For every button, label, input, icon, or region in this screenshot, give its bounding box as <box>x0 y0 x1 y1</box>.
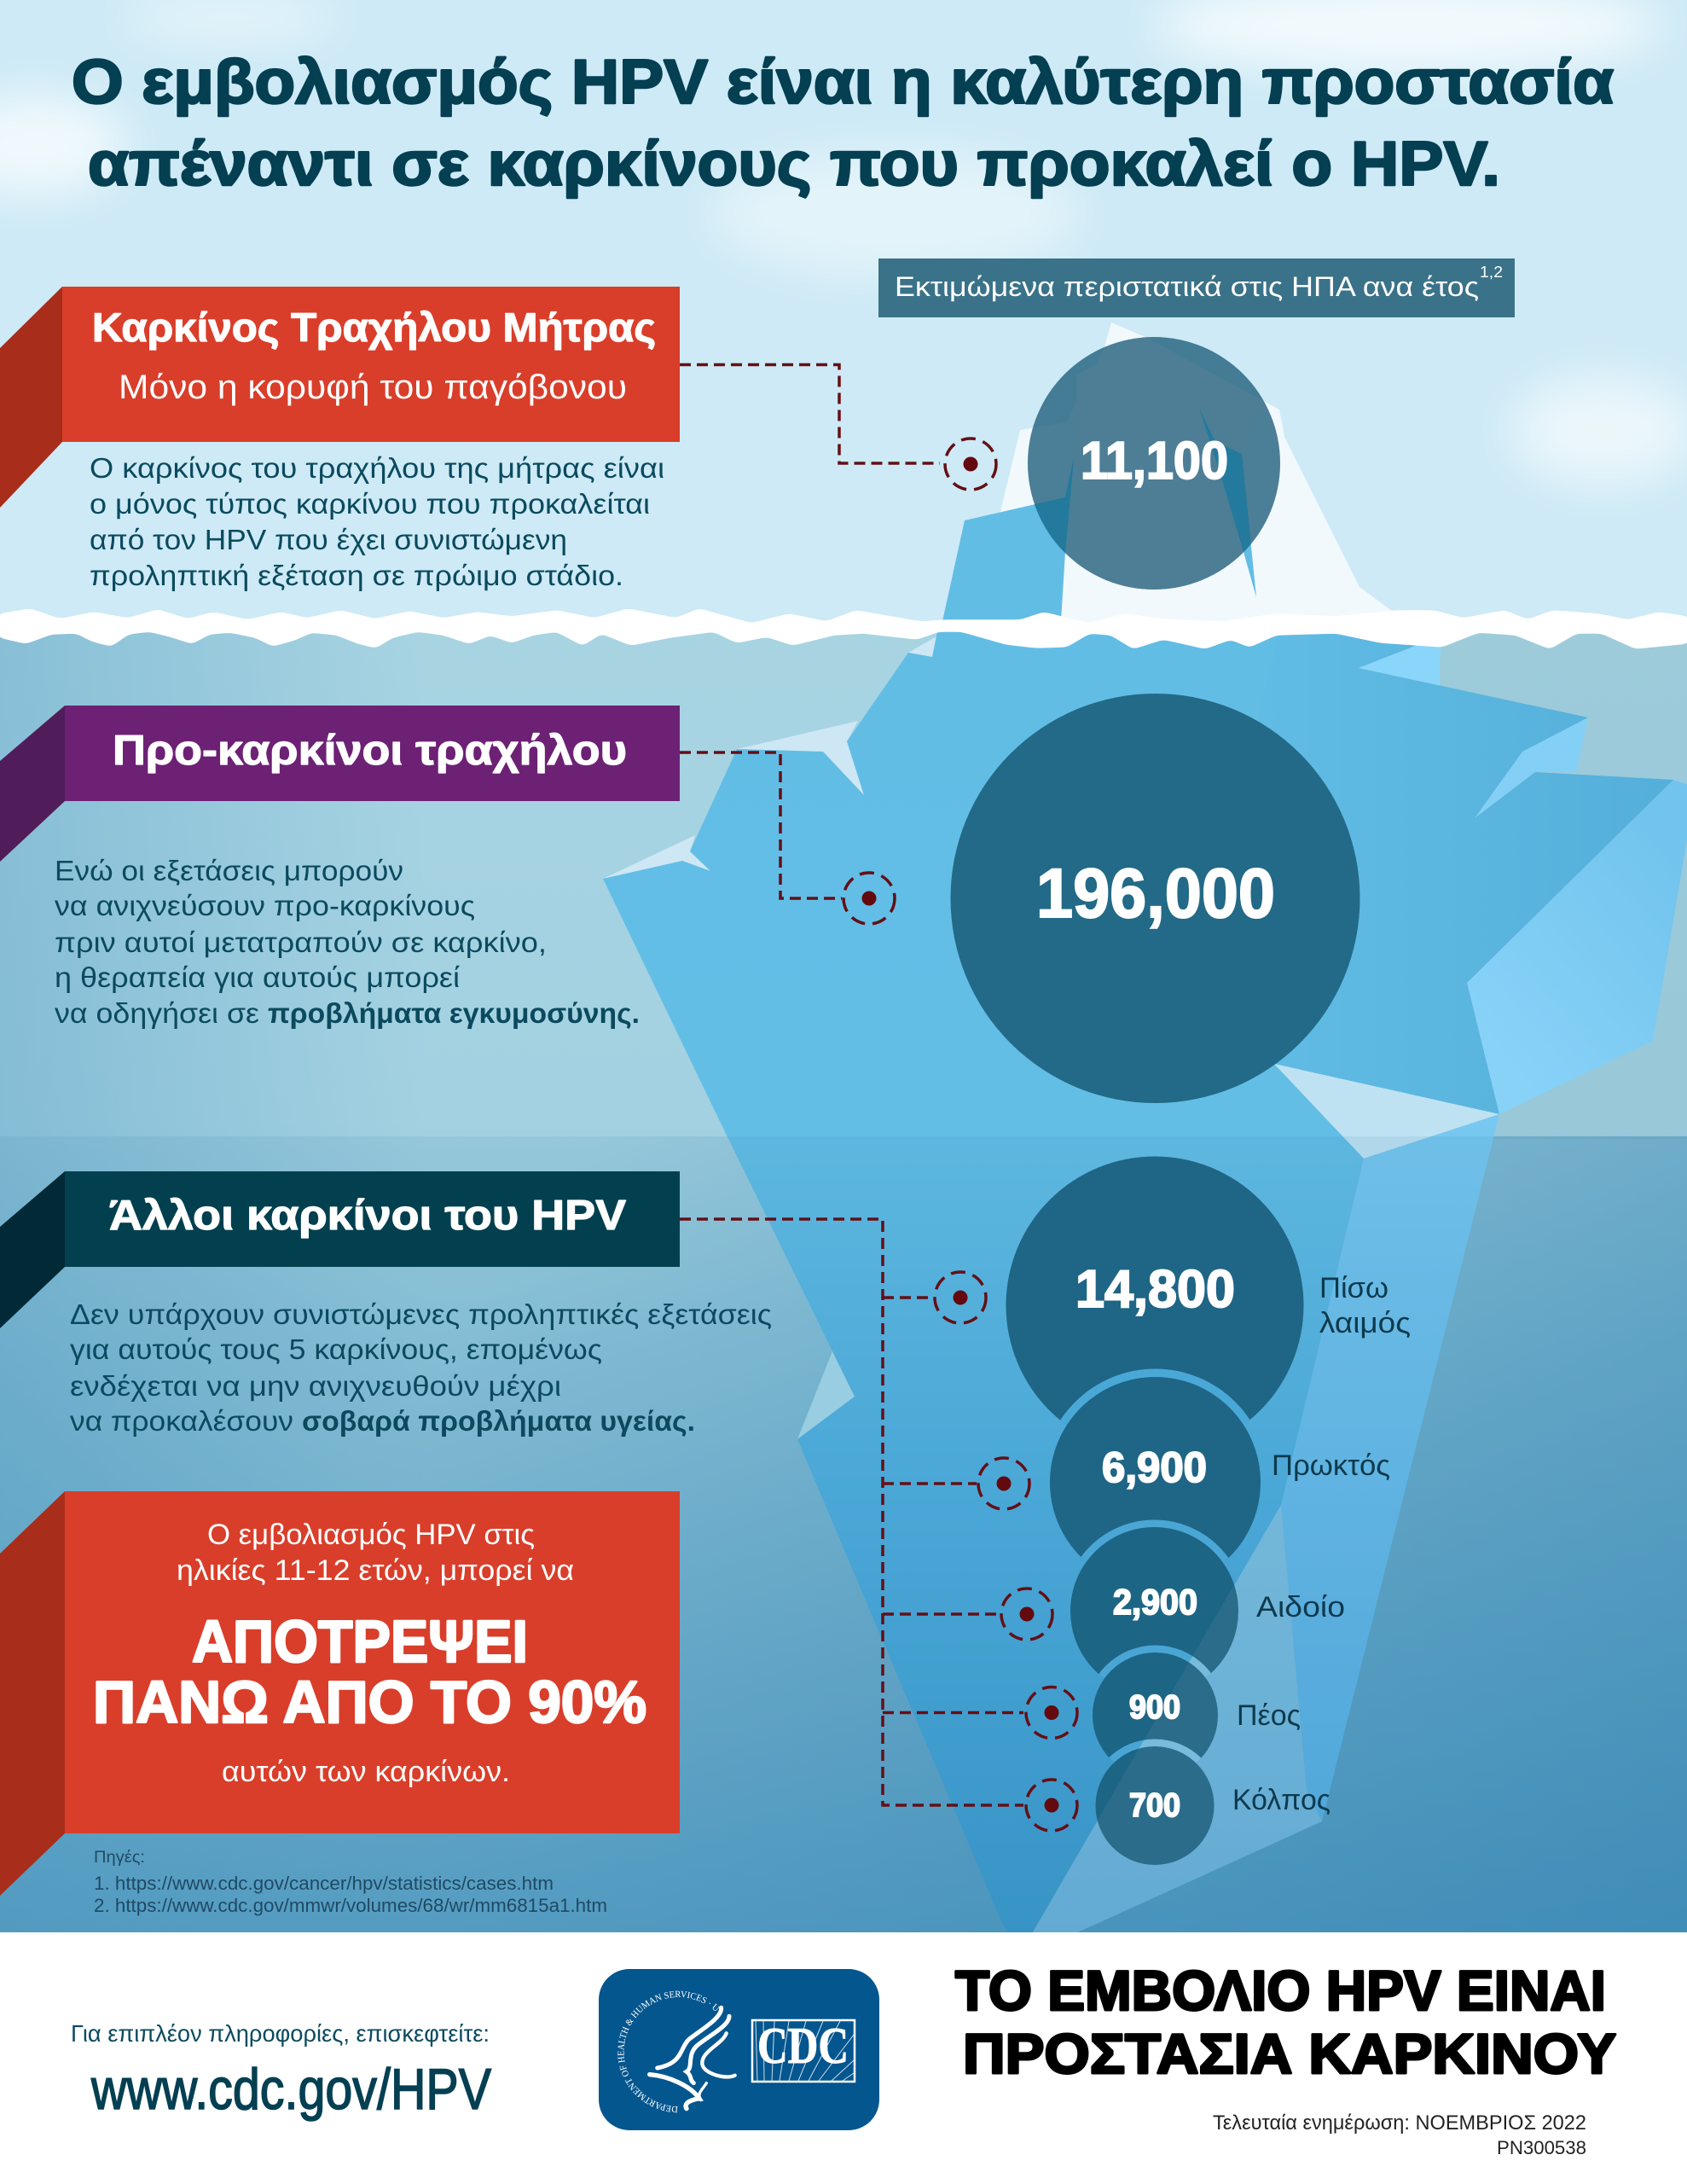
HHS seal text: DEPARTMENT OF HEALTH & HUMAN SERVICES · USA <box>617 1991 720 2112</box>
panel: cervical cancer <box>0 287 680 508</box>
label: penis: Πέος <box>1237 1699 1301 1732</box>
small ice spikes <box>603 636 1588 1439</box>
text: cervical cancer description: ο μόνος τύπος καρκίνου που προκαλείται <box>90 488 650 520</box>
title <box>72 48 1614 199</box>
text: pre-cancers description: προβλήματα εγκυμοσύνης. <box>268 997 640 1029</box>
connector: pre-cancers <box>680 752 895 924</box>
circle: 196,000 pre-cancers <box>950 694 1359 1103</box>
panel: pre-cancers <box>0 706 680 862</box>
circle: 700 vagina: 700 <box>1129 1787 1180 1824</box>
label: throat <box>1319 1272 1411 1339</box>
panel: other HPV cancers: Άλλοι καρκίνοι του HPV <box>109 1193 626 1239</box>
panel: pre-cancers: Προ-καρκίνοι τραχήλου <box>113 728 627 774</box>
callout: vaccination prevents over 90%: ΑΠΟΤΡΕΨΕΙ <box>192 1608 528 1675</box>
circle: 2,900 vulva <box>1070 1520 1238 1679</box>
tag: estimated cases per year: 1,2 <box>1480 264 1503 281</box>
footer: more information: www.cdc.gov/HPV <box>90 2057 492 2122</box>
sources: 1. https://www.cdc.gov/cancer/hpv/statistics/cases.htm <box>94 1873 554 1894</box>
text: pre-cancers description: Ενώ οι εξετάσεις μπορούν <box>55 855 403 886</box>
circle: 900 penis <box>1093 1645 1218 1763</box>
text: cervical cancer description: προληπτική εξέταση σε πρώιμο στάδιο. <box>90 560 623 591</box>
text: cervical cancer description: Ο καρκίνος του τραχήλου της μήτρας είναι <box>90 452 664 484</box>
text: pre-cancers description <box>55 855 640 1029</box>
circle: 11,100 cervical cancer: 11,100 <box>1081 432 1228 491</box>
circle: 11,100 cervical cancer <box>1028 337 1280 590</box>
text: other cancers description: σοβαρά προβλήματα υγείας. <box>302 1405 695 1437</box>
text: pre-cancers description: να οδηγήσει σε <box>55 997 259 1029</box>
callout: vaccination prevents over 90%: ηλικίες 11-12 ετών, μπορεί να <box>177 1554 574 1587</box>
text: other cancers description: να προκαλέσουν <box>70 1405 293 1437</box>
title: Ο εμβολιασμός HPV είναι η καλύτερη προστασία <box>72 48 1614 117</box>
text: cervical cancer description <box>90 452 664 591</box>
circle: 6,900 anus <box>1050 1368 1261 1563</box>
iceberg underwater <box>603 627 1687 1935</box>
text: pre-cancers description: πριν αυτοί μετατραπούν σε καρκίνο, <box>55 926 547 958</box>
footer: slogan <box>955 1959 1616 2085</box>
callout: vaccination prevents over 90%: αυτών των καρκίνων. <box>222 1756 510 1788</box>
label: anus: Πρωκτός <box>1272 1449 1390 1482</box>
text: cervical cancer description: από τον HPV που έχει συνιστώμενη <box>90 524 567 555</box>
footer: more information: Για επιπλέον πληροφορίες, επισκεφτείτε: <box>71 2020 490 2047</box>
text: other cancers description: Δεν υπάρχουν συνιστώμενες προληπτικές εξετάσεις <box>70 1298 772 1330</box>
connector: other HPV cancers <box>680 1219 1077 1831</box>
panel: cervical cancer: Καρκίνος Τραχήλου Μήτρας <box>92 305 656 350</box>
label: vulva: Αιδοίο <box>1256 1591 1345 1623</box>
depth band <box>0 1136 1687 1932</box>
circle: 196,000 pre-cancers: 196,000 <box>1036 855 1275 932</box>
footer: last updated <box>1213 2111 1586 2158</box>
footer: slogan: ΠΡΟΣΤΑΣΙΑ ΚΑΡΚΙΝΟΥ <box>963 2022 1616 2085</box>
callout: vaccination prevents over 90%: Ο εμβολιασμός HPV στις <box>207 1519 535 1551</box>
water background <box>0 627 1687 1932</box>
footer: more information <box>71 2020 492 2122</box>
circle: 900 penis: 900 <box>1129 1689 1180 1726</box>
circle: 700 vagina <box>1095 1739 1215 1865</box>
HHS eagle <box>650 2007 735 2109</box>
panel: other HPV cancers <box>0 1171 680 1328</box>
iceberg tip above water <box>936 322 1399 648</box>
text: pre-cancers description: η θεραπεία για αυτούς μπορεί <box>55 961 460 993</box>
label: throat: λαιμός <box>1319 1307 1411 1339</box>
panel: cervical cancer: Μόνο η κορυφή του παγόβονου <box>119 369 627 406</box>
lower right facet <box>1281 1114 1499 1821</box>
callout: vaccination prevents over 90%: ΠΑΝΩ ΑΠΟ ΤΟ 90% <box>93 1669 646 1735</box>
circle: 14,800 throat: 14,800 <box>1075 1260 1235 1319</box>
footer: last updated: Τελευταία ενημέρωση: ΝΟΕΜΒΡΙΟΣ 2022 <box>1213 2111 1586 2135</box>
icon: HHS and CDC logo <box>599 1969 879 2130</box>
right wing <box>1194 627 1673 1114</box>
waterline foam <box>0 611 1687 647</box>
text: other cancers description: ενδέχεται να μην ανιχνευθούν μέχρι <box>70 1370 561 1402</box>
tag: estimated cases per year <box>878 258 1515 317</box>
label: throat: Πίσω <box>1319 1272 1388 1304</box>
connector: cervical cancer <box>680 365 996 490</box>
footer: slogan: ΤΟ ΕΜΒΟΛΙΟ HPV ΕΙΝΑΙ <box>955 1959 1606 2022</box>
footer: last updated: PN300538 <box>1497 2137 1586 2158</box>
background: sky <box>0 0 1687 648</box>
circle: 2,900 vulva: 2,900 <box>1113 1582 1197 1622</box>
sources <box>94 1849 607 1916</box>
main ice body <box>603 627 1364 1933</box>
tag: estimated cases per year: Εκτιμώμενα περιστατικά στις ΗΠΑ ανα έτος <box>895 271 1479 302</box>
label: vagina: Κόλπος <box>1232 1784 1330 1816</box>
sources: 2. https://www.cdc.gov/mmwr/volumes/68/wr/mm6815a1.htm <box>94 1895 607 1916</box>
circle: 6,900 anus: 6,900 <box>1102 1443 1207 1491</box>
title: απέναντι σε καρκίνους που προκαλεί ο HPV. <box>88 130 1500 199</box>
pale ice shard <box>1274 1064 1499 1159</box>
lower pale facet <box>1031 1505 1322 1935</box>
callout: vaccination prevents over 90% <box>0 1491 680 1896</box>
sources: Πηγές: <box>94 1849 145 1867</box>
CDC box: CDC <box>757 2018 849 2074</box>
text: pre-cancers description: να ανιχνεύσουν προ-καρκίνους <box>55 890 475 921</box>
right light facet <box>1467 780 1687 1114</box>
footer background <box>0 1932 1687 2184</box>
text: other cancers description <box>70 1298 772 1437</box>
text: other cancers description: για αυτούς τους 5 καρκίνους, επομένως <box>70 1333 602 1365</box>
circle: 14,800 throat <box>1006 1157 1303 1454</box>
